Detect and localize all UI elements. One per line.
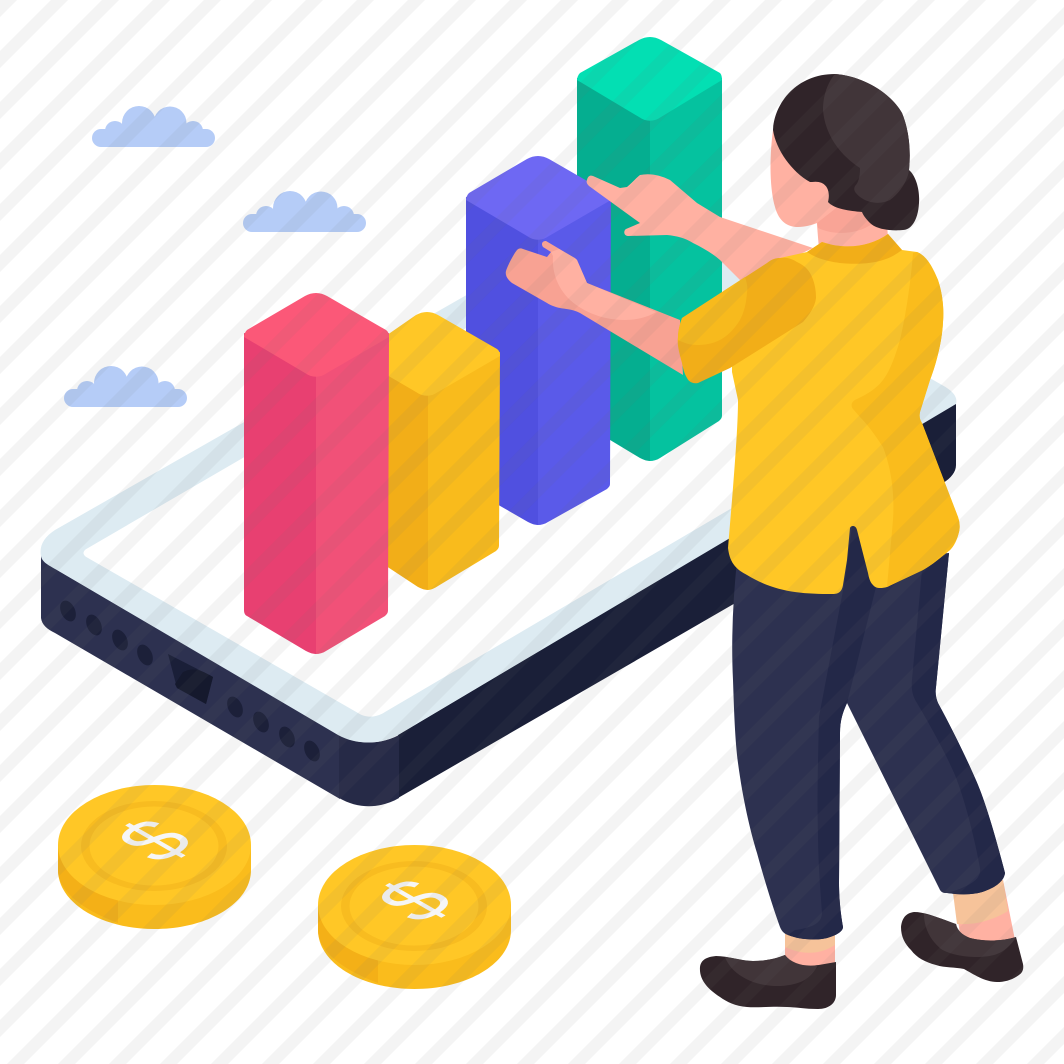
phone rounded corner bbox=[339, 735, 399, 806]
phone top bezel bbox=[41, 204, 956, 742]
bar: blue bbox=[466, 156, 611, 525]
cloud: top left bbox=[92, 106, 215, 147]
shirt bbox=[678, 234, 960, 594]
bar: yellow bbox=[380, 312, 500, 590]
phone left side face with ports bbox=[41, 556, 340, 799]
shirt: shaded right side bbox=[852, 252, 960, 587]
coin: right bbox=[318, 845, 511, 989]
neck bbox=[815, 200, 890, 262]
hair bbox=[773, 74, 919, 230]
shirt: sleeve bbox=[678, 258, 816, 383]
arm: upper with pointing hand bbox=[587, 174, 813, 283]
phone bbox=[41, 204, 956, 806]
phone right side face bbox=[398, 403, 956, 798]
coin: left bbox=[58, 785, 251, 929]
bar: red bbox=[244, 293, 389, 654]
shoe: back bbox=[901, 912, 1023, 982]
shoe: front bbox=[700, 955, 836, 1009]
shirt: collar bbox=[807, 234, 902, 264]
cloud: lower left bbox=[64, 366, 187, 407]
ankle: front foot bbox=[785, 930, 835, 972]
face bbox=[771, 130, 840, 227]
trousers shadow: front leg bbox=[788, 518, 877, 939]
trousers shadow: back leg bbox=[912, 553, 1005, 894]
cloud: middle bbox=[243, 191, 366, 232]
dollar sign: $ bbox=[357, 867, 472, 934]
bar: green bbox=[577, 37, 722, 461]
ankle: back foot bbox=[952, 880, 1016, 945]
arm: lower with hand bbox=[506, 241, 683, 375]
person bbox=[506, 74, 1023, 1009]
trousers: front leg bbox=[732, 518, 877, 939]
trousers: back leg bbox=[847, 553, 1005, 894]
dollar sign: $ bbox=[97, 807, 212, 874]
phone screen bbox=[84, 235, 914, 717]
